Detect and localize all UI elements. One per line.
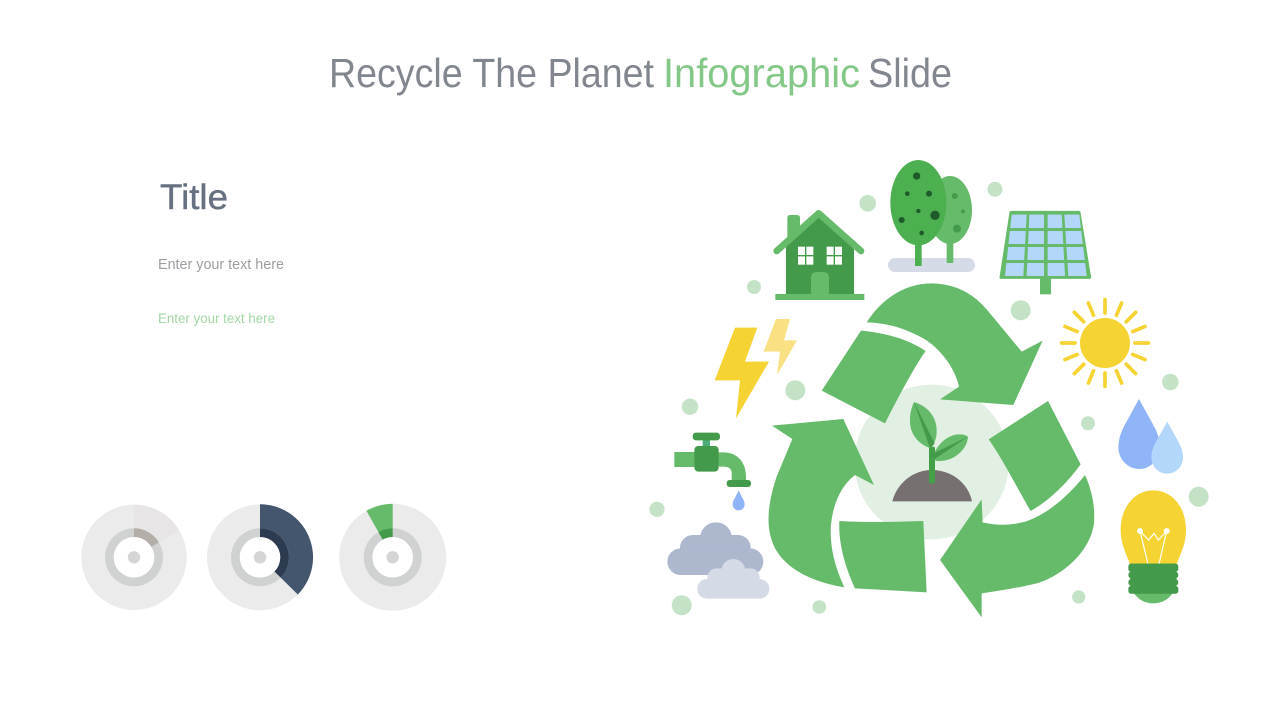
icon: trees xyxy=(888,160,975,272)
segment: bottom xyxy=(839,521,927,592)
donut chart 1 xyxy=(81,505,187,610)
title: Infographic xyxy=(663,50,860,96)
icon: faucet xyxy=(674,433,751,510)
icon: light cloud xyxy=(697,559,769,599)
icon: solar panel xyxy=(1001,212,1090,294)
title: Slide xyxy=(868,50,952,96)
green body text: Enter your text here xyxy=(158,310,275,326)
icon: dark cloud xyxy=(667,522,763,575)
segment: right xyxy=(989,401,1081,511)
center circle xyxy=(854,385,1009,539)
icon: water drops xyxy=(1118,399,1183,474)
arrow: bottom right xyxy=(940,475,1094,617)
segment: top left xyxy=(822,331,926,423)
arrow: top xyxy=(867,283,1043,405)
text block xyxy=(158,178,284,326)
icon: pale lightning xyxy=(764,319,797,375)
title: Recycle The Planet xyxy=(329,50,655,96)
top icons xyxy=(775,160,1090,300)
decorative green dots xyxy=(649,182,1209,615)
icon: sun xyxy=(1062,300,1148,386)
arrow: left xyxy=(769,419,874,587)
body text: Enter your text here xyxy=(158,256,284,273)
left icons xyxy=(667,319,797,599)
heading: Title: Title xyxy=(160,178,228,217)
right icons xyxy=(1062,300,1186,603)
donut chart 3 xyxy=(339,504,446,611)
icon: lightning xyxy=(715,328,769,418)
donut chart 2 xyxy=(207,504,313,610)
icon: light bulb xyxy=(1121,490,1186,603)
title xyxy=(329,50,952,96)
icon: seedling xyxy=(892,402,972,501)
recycle symbol xyxy=(769,283,1094,617)
icon: house xyxy=(775,213,864,300)
